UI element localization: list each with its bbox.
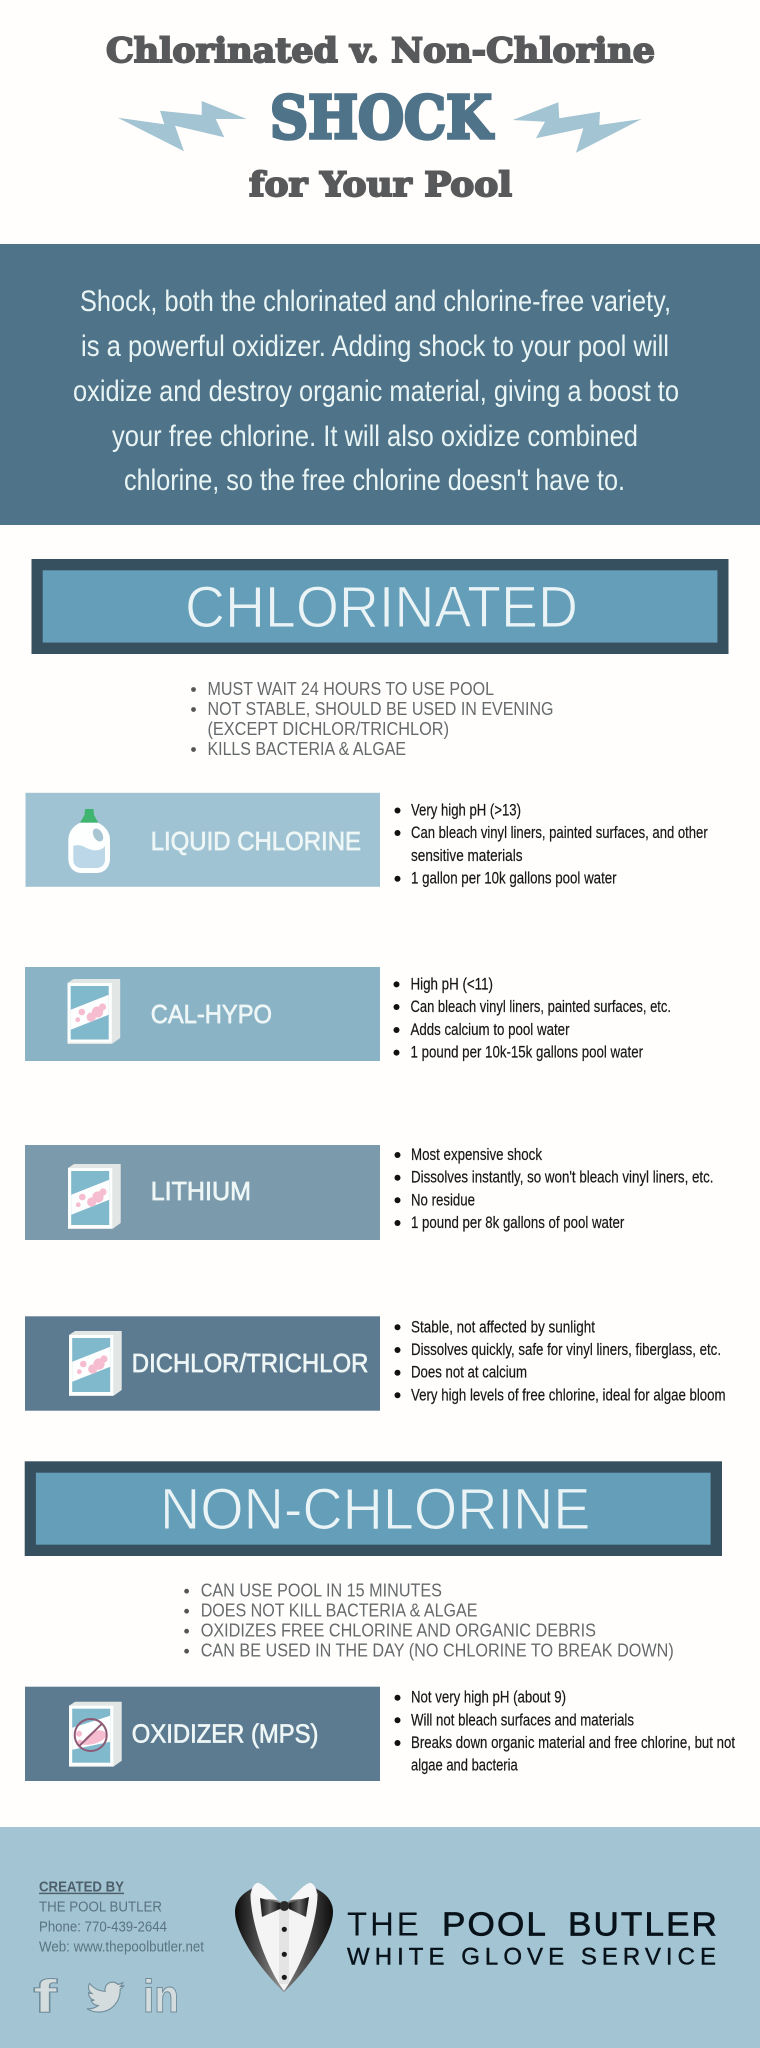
logo wordmark: POOL	[442, 1906, 548, 1943]
icon: crossed-out shock box	[69, 1702, 122, 1767]
list: non-chlorine key points: OXIDIZES FREE CHLORINE AND ORGANIC DEBRIS	[201, 1621, 596, 1641]
credits text: Phone: 770-439-2644	[39, 1920, 167, 1936]
title line: for Your Pool: for Your Pool	[249, 165, 512, 205]
section heading: NON-CHLORINE: NON-CHLORINE	[160, 1477, 590, 1542]
bullet list: High pH (<11)	[410, 974, 493, 993]
list: chlorinated key points: MUST WAIT 24 HOURS TO USE POOL	[208, 679, 494, 699]
bullet list: Will not bleach surfaces and materials	[411, 1710, 634, 1729]
title line: Chlorinated v. Non-Chlorine: Chlorinated v. Non-Chlorine	[106, 31, 655, 71]
list: non-chlorine key points: CAN USE POOL IN 15 MINUTES	[201, 1581, 442, 1601]
bullet list: Does not at calcium	[411, 1363, 527, 1382]
icon: linkedin: in	[143, 1970, 179, 2022]
bullet list: 1 gallon per 10k gallons pool water	[411, 869, 617, 888]
list: chlorinated key points	[191, 679, 554, 759]
list: non-chlorine key points: DOES NOT KILL BACTERIA & ALGAE	[201, 1601, 477, 1621]
row: cal-hypo	[25, 967, 671, 1062]
icon: shock box	[69, 1331, 122, 1396]
credits text: Web: www.thepoolbutler.net	[39, 1940, 204, 1956]
label: LITHIUM	[151, 1176, 251, 1206]
bullet list: Stable, not affected by sunlight	[411, 1317, 595, 1336]
bullet list: 1 pound per 10k-15k gallons pool water	[410, 1043, 643, 1062]
title block	[106, 31, 655, 205]
credits text: CREATED BY	[39, 1880, 124, 1896]
section heading: NON-CHLORINE	[25, 1461, 722, 1556]
logo wordmark	[347, 1906, 719, 1970]
list: chlorinated key points: (EXCEPT DICHLOR/TRICHLOR)	[208, 719, 449, 739]
label: CAL-HYPO	[151, 999, 272, 1029]
bullet list: No residue	[411, 1190, 475, 1209]
icon: shock box	[68, 1164, 121, 1229]
panel: intro banner	[0, 244, 760, 525]
credits text	[39, 1880, 204, 1956]
intro paragraph: is a powerful oxidizer. Adding shock to your pool will	[81, 330, 669, 363]
credits text: THE POOL BUTLER	[39, 1900, 162, 1916]
label: LIQUID CHLORINE	[151, 826, 361, 856]
list: chlorinated key points: KILLS BACTERIA & ALGAE	[208, 739, 406, 759]
intro paragraph: Shock, both the chlorinated and chlorine-free variety,	[80, 285, 671, 318]
bullet list: 1 pound per 8k gallons of pool water	[411, 1213, 625, 1232]
icon: shock box	[68, 979, 120, 1044]
list: non-chlorine key points	[184, 1581, 674, 1661]
intro paragraph: chlorine, so the free chlorine doesn't have to.	[124, 464, 625, 497]
bullet list: Can bleach vinyl liners, painted surfaces, etc.	[410, 997, 671, 1016]
intro paragraph: your free chlorine. It will also oxidize combined	[112, 420, 638, 453]
intro paragraph	[73, 285, 679, 497]
row: dichlor/trichlor	[25, 1316, 726, 1411]
label: DICHLOR/TRICHLOR	[132, 1348, 368, 1378]
icon: facebook: f	[33, 1970, 58, 2022]
panel: footer	[0, 1827, 760, 2048]
bullet list	[394, 1688, 735, 1775]
label: OXIDIZER (MPS)	[132, 1718, 318, 1748]
icon: left lightning bolt	[118, 101, 247, 151]
bullet list: Adds calcium to pool water	[410, 1020, 570, 1039]
icon: right lightning bolt	[513, 102, 642, 153]
bullet list	[394, 1145, 714, 1232]
bullet list: Very high pH (>13)	[411, 800, 521, 820]
bullet list	[394, 974, 671, 1062]
logo wordmark: THE	[347, 1906, 422, 1943]
bullet list: Not very high pH (about 9)	[411, 1688, 566, 1707]
logo wordmark: BUTLER	[568, 1906, 719, 1943]
logo wordmark: WHITE GLOVE SERVICE	[347, 1943, 716, 1970]
section heading: CHLORINATED: CHLORINATED	[185, 575, 578, 640]
icon: bottle	[68, 809, 110, 873]
logo: tuxedo	[235, 1883, 333, 1992]
bullet list: algae and bacteria	[411, 1756, 518, 1775]
list: non-chlorine key points: CAN BE USED IN THE DAY (NO CHLORINE TO BREAK DOWN)	[201, 1641, 674, 1661]
icon: twitter	[87, 1982, 124, 2012]
section heading: CHLORINATED	[32, 559, 728, 654]
row: liquid chlorine	[26, 793, 708, 888]
list: chlorinated key points: NOT STABLE, SHOULD BE USED IN EVENING	[208, 699, 554, 719]
bullet list	[394, 1317, 726, 1404]
bullet list: Most expensive shock	[411, 1145, 542, 1164]
row: lithium	[25, 1145, 714, 1240]
title word: SHOCK: SHOCK	[270, 83, 494, 152]
bullet list: sensitive materials	[411, 846, 522, 865]
row: oxidizer (MPS)	[25, 1687, 735, 1781]
bullet list	[394, 800, 708, 888]
